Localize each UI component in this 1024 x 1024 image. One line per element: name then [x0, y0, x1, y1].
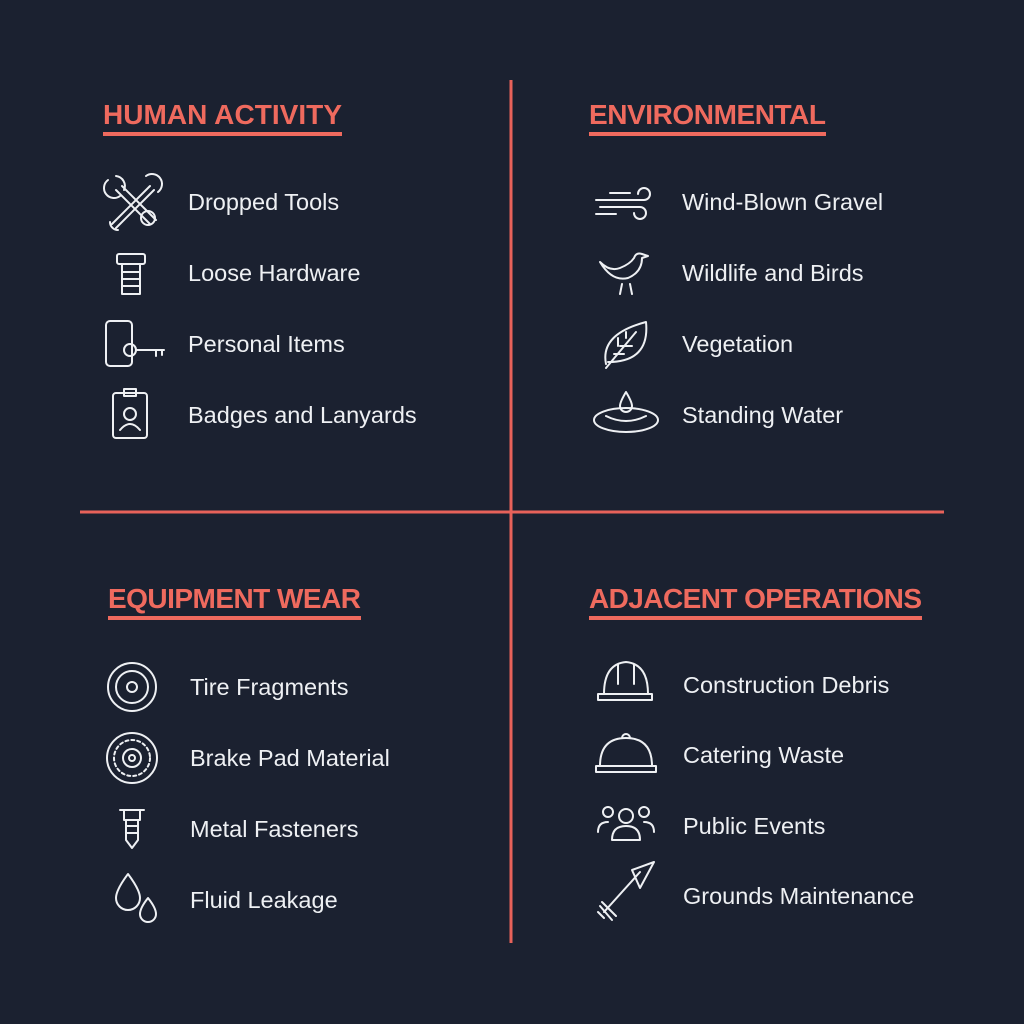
item: grounds — [598, 862, 914, 920]
item: personal items: Personal Items — [188, 331, 345, 357]
panel: human activity — [103, 99, 417, 438]
item: loose hardware — [117, 254, 360, 294]
heading: equipment wear: EQUIPMENT WEAR — [108, 583, 361, 614]
item: public events: Public Events — [683, 813, 825, 839]
item: fasteners: Metal Fasteners — [190, 816, 358, 842]
item: construction — [598, 662, 889, 700]
item: vegetation: Vegetation — [682, 331, 793, 357]
item: badges: Badges and Lanyards — [188, 402, 417, 428]
heading: environmental: ENVIRONMENTAL — [589, 99, 826, 130]
item: tire: Tire Fragments — [190, 674, 348, 700]
item: tire — [108, 663, 348, 711]
item: personal items — [106, 321, 345, 366]
item: fasteners — [120, 810, 358, 848]
item: brake: Brake Pad Material — [190, 745, 390, 771]
item: loose hardware: Loose Hardware — [188, 260, 360, 286]
heading: adjacent operations: ADJACENT OPERATIONS — [589, 583, 922, 614]
item: wind: Wind-Blown Gravel — [682, 189, 883, 215]
item: catering — [596, 734, 844, 772]
heading: human activity: HUMAN ACTIVITY — [103, 99, 342, 130]
panel: environmental — [589, 99, 883, 432]
item: water: Standing Water — [682, 402, 843, 428]
item: fluid: Fluid Leakage — [190, 887, 338, 913]
item: fluid — [116, 874, 338, 922]
item: birds: Wildlife and Birds — [682, 260, 864, 286]
item: dropped tools — [104, 174, 339, 230]
item: birds — [600, 254, 864, 294]
item: water — [594, 392, 843, 432]
item: dropped tools: Dropped Tools — [188, 189, 339, 215]
item: wind — [596, 188, 883, 219]
item: brake — [107, 733, 390, 783]
item: catering: Catering Waste — [683, 742, 844, 768]
item: vegetation — [605, 322, 793, 368]
item: grounds: Grounds Maintenance — [683, 883, 914, 909]
item: construction: Construction Debris — [683, 672, 889, 698]
item: public events — [598, 807, 825, 840]
panel: equipment wear — [107, 583, 390, 922]
item: badges — [113, 389, 417, 438]
panel: adjacent operations — [589, 583, 922, 920]
